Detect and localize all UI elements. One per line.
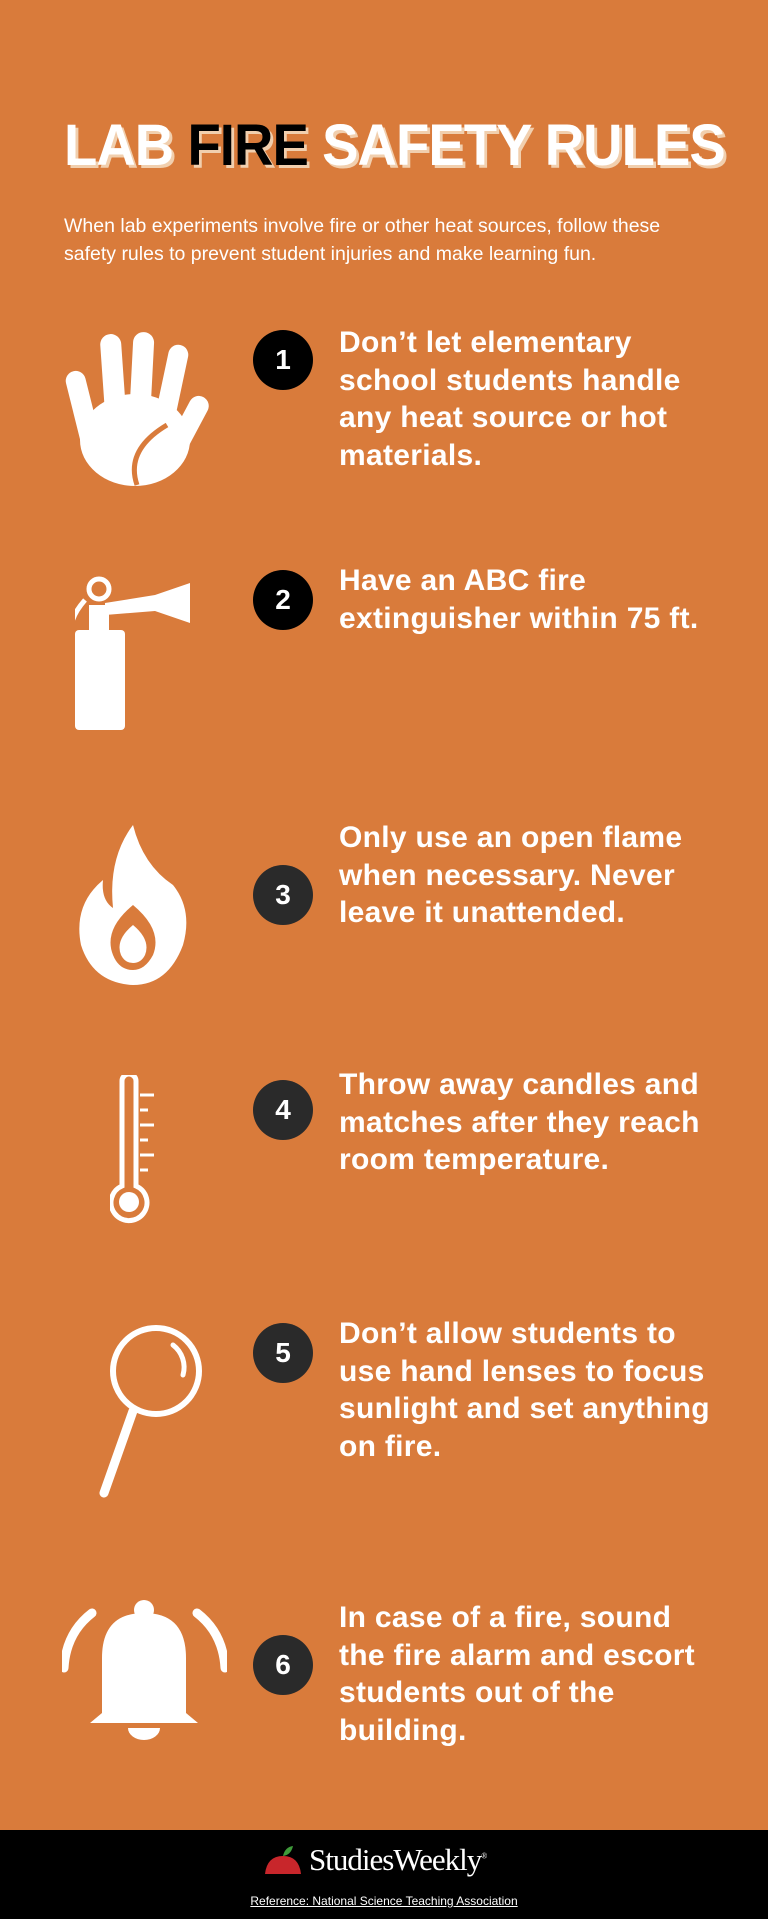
number 2: 2 xyxy=(275,584,291,615)
icon: alarm bell xyxy=(62,1600,227,1740)
rule 4 xyxy=(110,1068,700,1224)
rule text: In case of a fire, sound xyxy=(339,1601,671,1634)
rule text: any heat source or hot xyxy=(339,401,667,434)
intro text xyxy=(64,215,660,265)
intro text: safety rules to prevent student injuries and make learning fun. xyxy=(64,243,596,265)
number 4: 4 xyxy=(275,1094,291,1125)
rule 1 xyxy=(66,326,681,486)
title: LAB FIRE SAFETY RULES xyxy=(64,113,725,178)
rule text: the fire alarm and escort xyxy=(339,1638,695,1672)
rule text: Throw away candles and xyxy=(339,1068,699,1101)
footer xyxy=(0,1830,768,1919)
rule text: on fire. xyxy=(339,1430,441,1462)
rule text: sunlight and set anything xyxy=(339,1392,710,1425)
number 6: 6 xyxy=(275,1649,291,1680)
rule text: building. xyxy=(339,1714,467,1746)
rule text xyxy=(339,326,681,472)
number 3 xyxy=(253,865,313,925)
icon: flame xyxy=(79,825,186,985)
rule text: extinguisher within 75 ft. xyxy=(339,602,699,634)
reference text: Reference: National Science Teaching Association xyxy=(250,1894,518,1908)
rule text: materials. xyxy=(339,438,482,472)
rule text: Don’t let elementary xyxy=(339,326,632,359)
rule 6 xyxy=(62,1600,695,1746)
rule text: school students handle xyxy=(339,364,681,396)
logo: StudiesWeekly® xyxy=(309,1842,486,1877)
icon: apple xyxy=(265,1846,301,1874)
number 3: 3 xyxy=(275,879,291,910)
rule text: when necessary. Never xyxy=(339,858,675,892)
number 1: 1 xyxy=(275,344,291,375)
number 2 xyxy=(253,570,313,630)
rule text xyxy=(339,564,699,634)
icon: thermometer xyxy=(110,1075,154,1224)
rule text: matches after they reach xyxy=(339,1106,700,1138)
icon: hand xyxy=(66,332,209,486)
icon: fire extinguisher xyxy=(75,576,190,730)
rule text: Have an ABC fire xyxy=(339,564,586,597)
number 5 xyxy=(253,1323,313,1383)
rule text xyxy=(339,1068,700,1176)
rule text: leave it unattended. xyxy=(339,896,625,929)
rule text: Don’t allow students to xyxy=(339,1317,676,1350)
intro text: When lab experiments involve fire or other heat sources, follow these xyxy=(64,215,660,237)
number 1 xyxy=(253,330,313,390)
icon: magnifying glass xyxy=(100,1325,202,1498)
rule text xyxy=(338,821,682,929)
rule text: use hand lenses to focus xyxy=(339,1354,705,1388)
rule 5 xyxy=(100,1317,710,1498)
rule text: room temperature. xyxy=(339,1143,609,1176)
number 6 xyxy=(253,1635,313,1695)
rule 2 xyxy=(75,564,699,730)
rule 3 xyxy=(79,821,682,985)
rule text: Only use an open flame xyxy=(339,821,682,854)
rule text xyxy=(339,1317,710,1462)
number 4 xyxy=(253,1080,313,1140)
rule text: students out of the xyxy=(339,1676,615,1709)
rule text xyxy=(339,1601,695,1746)
number 5: 5 xyxy=(275,1337,291,1368)
